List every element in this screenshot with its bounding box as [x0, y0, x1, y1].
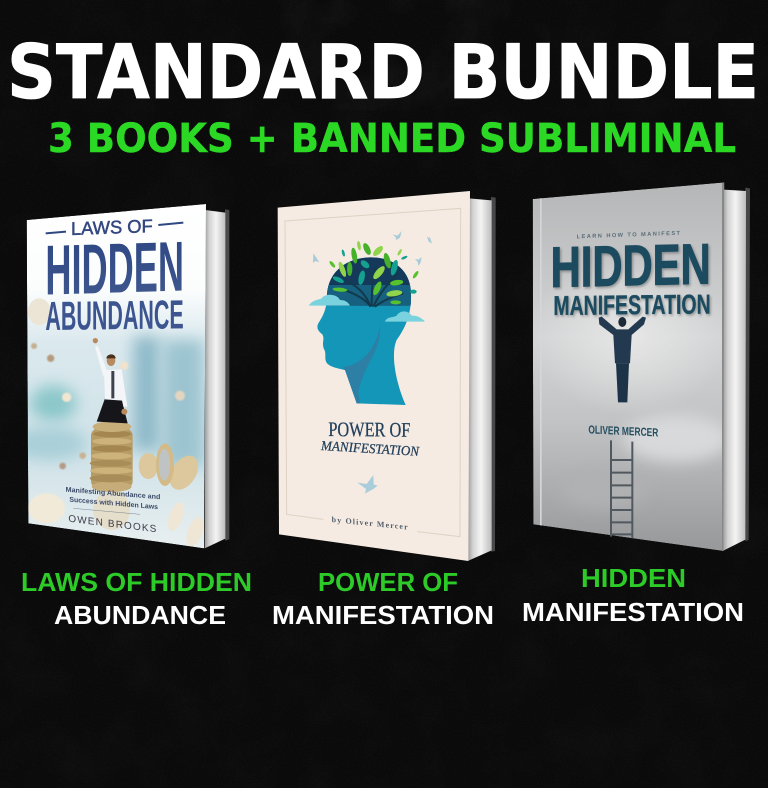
book: Hidden Manifestation	[530, 182, 750, 552]
label: Laws of Hidden Abundance: ABUNDANCE	[54, 600, 226, 630]
cover title: HIDDEN	[45, 227, 184, 310]
cover tagline: LEARN HOW TO MANIFEST	[577, 231, 681, 240]
cover author: OLIVER MERCER	[588, 423, 659, 439]
cover	[530, 182, 730, 552]
cover title: LAWS OF	[71, 215, 153, 239]
label: Power of Manifestation: MANIFESTATION	[272, 600, 494, 630]
illustration: head with leaves	[309, 241, 425, 412]
book pages and back cover	[205, 209, 229, 548]
illustration: ladder	[611, 440, 632, 538]
cover title: ABUNDANCE	[45, 291, 184, 339]
illustration: hanging man	[599, 317, 646, 402]
label: Hidden Manifestation: MANIFESTATION	[522, 597, 744, 627]
label: Power of Manifestation: POWER OF	[318, 567, 458, 597]
illustration: man on coin stack	[90, 338, 133, 530]
frame	[285, 208, 461, 537]
illustration: loose coins	[139, 443, 204, 495]
cover title: MANIFESTATION	[320, 438, 420, 459]
cover author: by Oliver Mercer	[332, 515, 408, 532]
label: Laws of Hidden Abundance: LAWS OF HIDDEN	[21, 567, 252, 597]
cover title	[551, 232, 711, 321]
cover	[278, 191, 470, 561]
label: Laws of Hidden Abundance	[21, 567, 252, 630]
icon: dove	[357, 475, 378, 494]
cover subtitle: Success with Hidden Laws	[69, 497, 158, 511]
cover title: POWER OF	[328, 419, 410, 442]
cover title	[45, 215, 184, 339]
book: Laws of Hidden Abundance	[13, 204, 229, 548]
cover title: HIDDEN	[551, 232, 711, 300]
cover title	[320, 419, 420, 459]
cover subtitle: Manifesting Abundance and	[66, 487, 160, 501]
subtitle: 3 BOOKS + BANNED SUBLIMINAL	[48, 116, 736, 162]
cover subtitle	[66, 487, 160, 514]
icons: birds	[313, 231, 432, 266]
label: Hidden Manifestation: HIDDEN	[581, 563, 686, 593]
cover author: OWEN BROOKS	[68, 514, 157, 535]
book pages and back cover	[723, 188, 750, 551]
label: Hidden Manifestation	[522, 563, 744, 627]
book pages and back cover	[468, 197, 496, 561]
book: Power of Manifestation	[278, 191, 496, 561]
cover artwork	[13, 204, 207, 548]
label: Power of Manifestation	[272, 567, 494, 630]
cover title: MANIFESTATION	[553, 288, 711, 321]
